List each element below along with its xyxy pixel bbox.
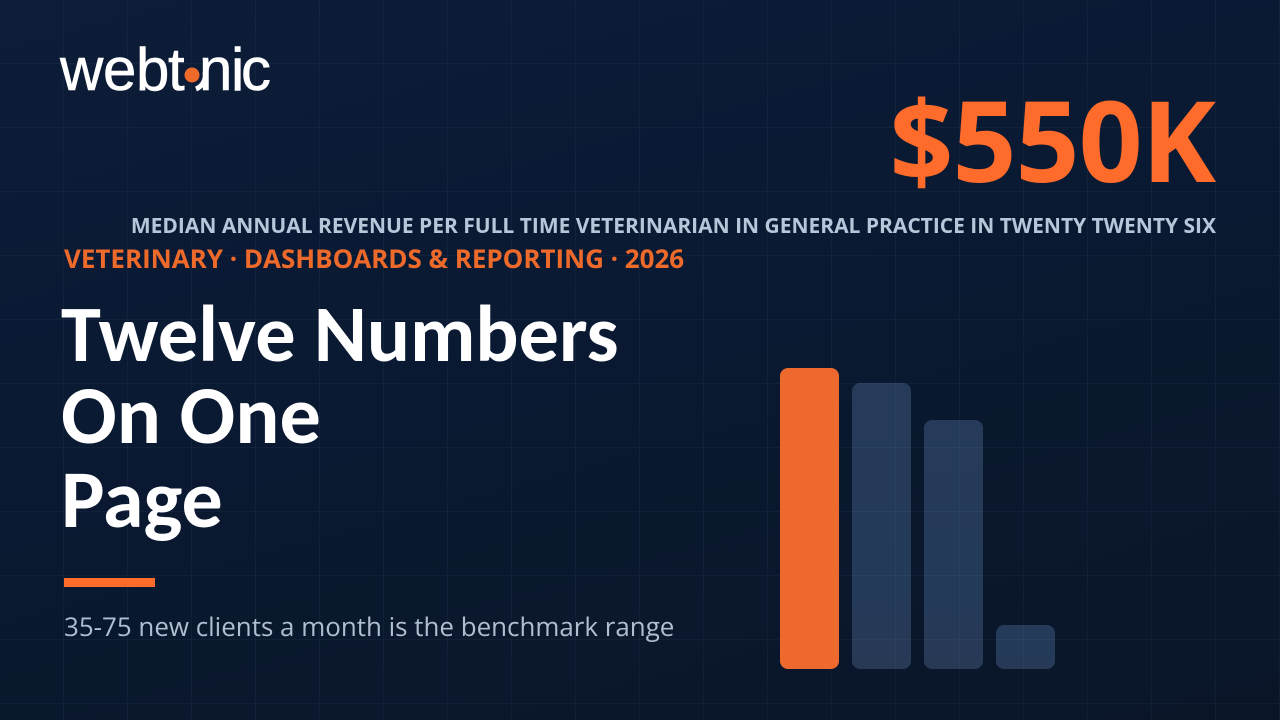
bar 4 [996, 625, 1055, 669]
eyebrow: VETERINARY · DASHBOARDS & REPORTING · 2026 [64, 240, 684, 276]
title: On One [61, 366, 321, 466]
title [61, 284, 619, 550]
stat caption: MEDIAN ANNUAL REVENUE PER FULL TIME VETERINARIAN IN GENERAL PRACTICE IN TWENTY TWENTY SIX [131, 212, 1216, 240]
title: Twelve Numbers [61, 284, 619, 383]
accent rule [64, 578, 155, 587]
title: Page [61, 450, 223, 550]
bar 2 [852, 383, 911, 669]
bar 3 [924, 420, 983, 669]
big stat: $550K: $550K [889, 62, 1215, 215]
logo: webtonic: webt [59, 36, 185, 102]
subtitle: 35-75 new clients a month is the benchmark range [64, 608, 674, 644]
bar 1: highlighted bar [780, 368, 839, 669]
logo: webtonic [59, 36, 271, 102]
logo: webtonic: nic [199, 36, 271, 102]
bar chart: muted bars [852, 383, 1055, 669]
